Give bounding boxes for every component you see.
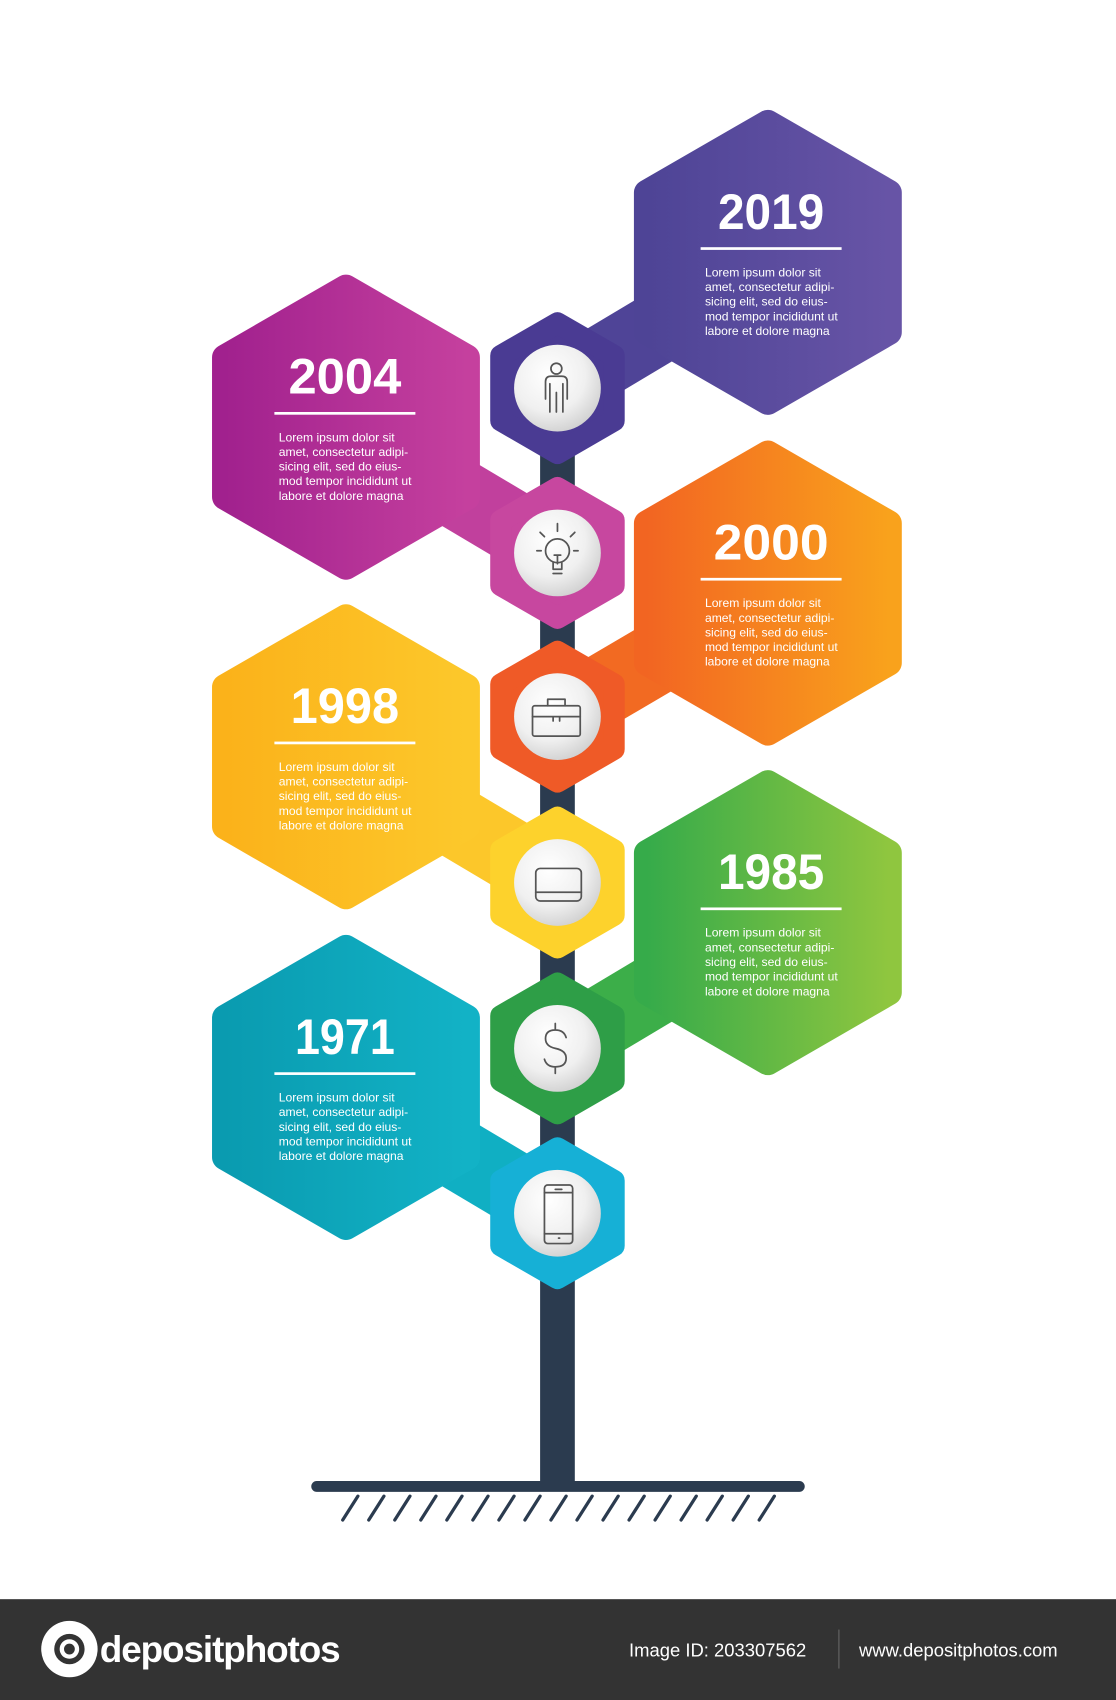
text 2019: Lorem ipsum dolor sit <box>705 265 822 279</box>
text 1985: sicing elit, sed do eius- <box>705 955 828 969</box>
hexagon: 2000 <box>647 454 889 733</box>
small hex: 1985 <box>501 983 614 1113</box>
text 1985: mod tempor incididunt ut <box>705 970 838 984</box>
text 1971: sicing elit, sed do eius- <box>279 1120 401 1134</box>
icon: briefcase <box>533 699 580 736</box>
text 1985: amet, consectetur adipi- <box>705 940 834 954</box>
text 1971: amet, consectetur adipi- <box>279 1105 408 1119</box>
text 2019: amet, consectetur adipi- <box>705 280 834 294</box>
icon: card <box>536 868 581 901</box>
year 1971: 1971 <box>295 1009 395 1065</box>
text 2000: Lorem ipsum dolor sit <box>705 596 822 610</box>
icon: dollar <box>544 1023 566 1073</box>
text 1985: labore et dolore magna <box>705 984 830 998</box>
item: 1985 <box>501 783 889 1113</box>
text 2004: Lorem ipsum dolor sit <box>279 430 395 444</box>
text 2004: amet, consectetur adipi- <box>279 445 408 459</box>
ground <box>311 1481 805 1520</box>
text 1998: Lorem ipsum dolor sit <box>279 760 395 774</box>
year 2004: 2004 <box>288 349 402 405</box>
icon: phone <box>544 1185 573 1244</box>
text 2000: labore et dolore magna <box>705 655 830 669</box>
item: 2000 <box>501 454 889 782</box>
text 2019: labore et dolore magna <box>705 324 830 338</box>
year 2019: 2019 <box>718 184 824 240</box>
text 2000: sicing elit, sed do eius- <box>705 625 828 639</box>
text 2019: mod tempor incididunt ut <box>705 309 838 323</box>
hexagon: 2004 <box>225 288 467 567</box>
text 1998: sicing elit, sed do eius- <box>279 789 401 803</box>
text 1998: mod tempor incididunt ut <box>279 804 412 818</box>
text 1985: Lorem ipsum dolor sit <box>705 926 822 940</box>
text 2000: mod tempor incididunt ut <box>705 640 838 654</box>
year 1985: 1985 <box>718 844 824 900</box>
item: 1971 <box>225 948 614 1278</box>
small hex: 2000 <box>501 652 614 782</box>
stem <box>540 412 575 1488</box>
item: 2019 <box>501 123 889 453</box>
small hex: 2004 <box>501 488 614 618</box>
icon: person <box>546 363 567 412</box>
small hex: 2019 <box>501 323 614 453</box>
hexagon: 1998 <box>225 617 467 896</box>
footer id: Image ID: 203307562 <box>629 1640 806 1661</box>
text 2004: sicing elit, sed do eius- <box>279 460 401 474</box>
text 1971: labore et dolore magna <box>279 1149 404 1163</box>
text 1971: Lorem ipsum dolor sit <box>279 1091 395 1105</box>
text 1998: amet, consectetur adipi- <box>279 774 408 788</box>
footer url: www.depositphotos.com <box>858 1640 1058 1661</box>
text 2000: amet, consectetur adipi- <box>705 611 834 625</box>
item: 2004 <box>225 288 614 618</box>
footer logo <box>41 1621 340 1677</box>
footer logo: depositphotos <box>100 1629 340 1670</box>
year 1998: 1998 <box>291 678 399 734</box>
small hex: 1998 <box>501 817 614 948</box>
hexagon: 1985 <box>647 783 889 1062</box>
text 2004: mod tempor incididunt ut <box>279 474 412 488</box>
text 2019: sicing elit, sed do eius- <box>705 295 828 309</box>
small hex: 1971 <box>501 1148 614 1278</box>
text 1998: labore et dolore magna <box>279 818 404 832</box>
year 2000: 2000 <box>714 514 829 570</box>
footer <box>0 1599 1116 1700</box>
text 1971: mod tempor incididunt ut <box>279 1134 412 1148</box>
hexagon: 2019 <box>647 123 889 402</box>
hexagon: 1971 <box>225 948 467 1227</box>
text 2004: labore et dolore magna <box>279 489 404 503</box>
item: 1998 <box>225 617 614 948</box>
icon: bulb <box>537 524 578 574</box>
